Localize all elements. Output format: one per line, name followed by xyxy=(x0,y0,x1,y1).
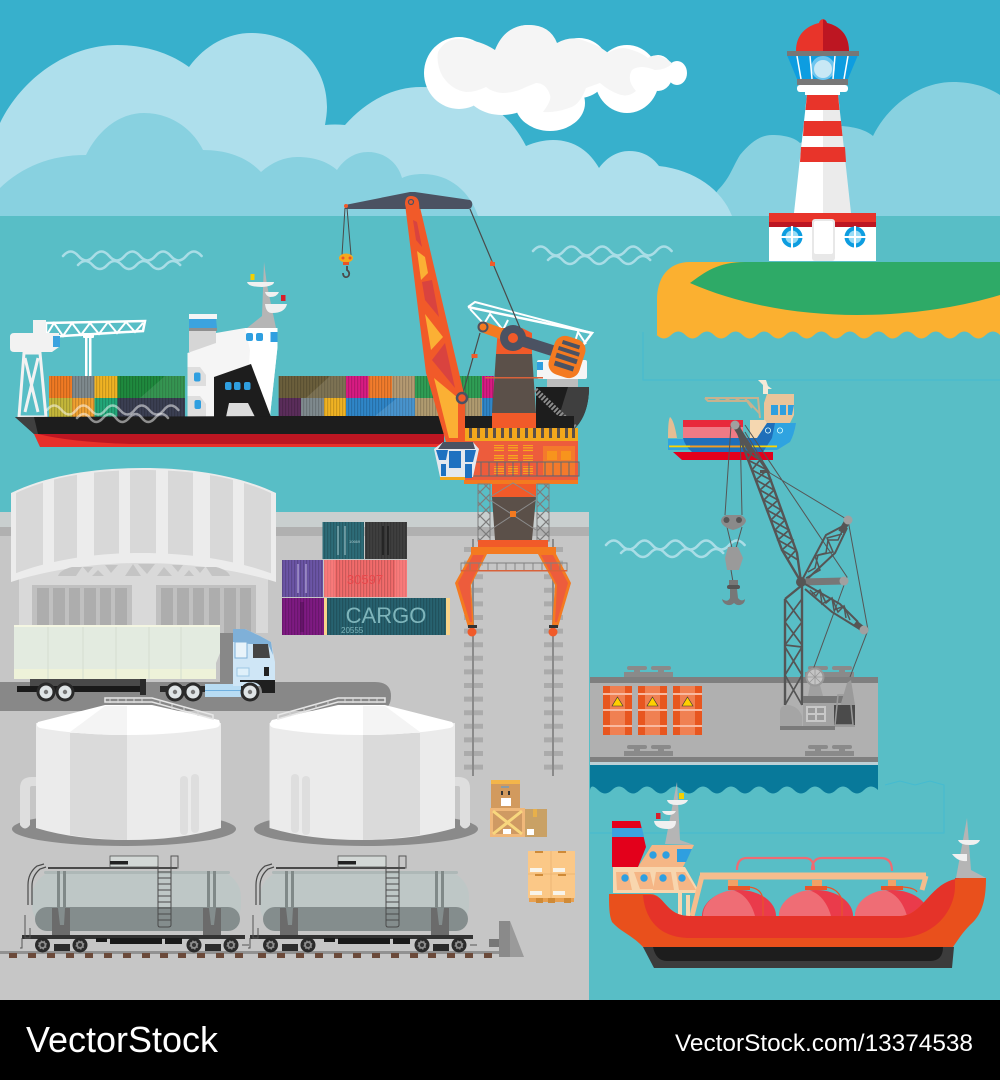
waves: upper right xyxy=(533,246,672,264)
curved end ladder xyxy=(256,864,274,905)
container coral 30597 xyxy=(324,560,407,597)
dock xyxy=(590,666,878,765)
LPG tanker xyxy=(609,782,986,968)
jib arm xyxy=(478,322,588,381)
sand xyxy=(657,262,1000,338)
lantern room xyxy=(787,55,858,79)
top rail and walkway xyxy=(48,867,177,869)
container ship xyxy=(10,262,589,447)
drum roof xyxy=(11,468,276,582)
gantry crane xyxy=(339,192,592,636)
funnel xyxy=(612,821,646,867)
hook assembly xyxy=(721,425,746,605)
cardboard boxes and crate xyxy=(490,780,575,903)
bow with ladder xyxy=(536,387,589,429)
container CARGO: CARGO xyxy=(346,603,426,628)
container CARGO xyxy=(324,598,450,635)
frame xyxy=(22,935,245,939)
bridge xyxy=(613,845,700,893)
bollards xyxy=(624,666,854,756)
deck pipe frame xyxy=(680,858,926,916)
tower red bands xyxy=(800,94,846,162)
top beam xyxy=(345,192,472,209)
hull xyxy=(15,416,536,434)
container purple xyxy=(282,560,323,597)
truss band xyxy=(58,564,230,576)
tower xyxy=(794,94,823,213)
ropes xyxy=(463,209,520,393)
containers: aft stack xyxy=(49,376,185,417)
tank wagon left xyxy=(20,856,249,952)
waves: mid right xyxy=(606,540,745,557)
round windows xyxy=(782,226,802,248)
shipping containers xyxy=(282,522,450,635)
containers: forward stack xyxy=(279,376,494,416)
grass xyxy=(690,262,1000,315)
cab xyxy=(233,629,275,686)
gas domes xyxy=(702,880,929,942)
deck crane xyxy=(705,398,760,418)
cloud: right bank behind lighthouse xyxy=(700,82,1000,216)
tank xyxy=(260,871,469,931)
ground xyxy=(0,512,589,1000)
box top xyxy=(491,780,520,808)
legs xyxy=(455,554,487,627)
cargo xyxy=(683,420,743,438)
container dark xyxy=(365,522,407,559)
ladder xyxy=(158,866,171,927)
lower tower xyxy=(785,586,802,705)
tank xyxy=(32,871,241,931)
aft mast xyxy=(654,782,694,845)
bow mast xyxy=(952,818,986,878)
sky xyxy=(0,0,1000,216)
rail line and buffer stop xyxy=(0,921,524,958)
wooden crate xyxy=(490,808,525,837)
container teal xyxy=(322,522,364,559)
road xyxy=(0,682,391,711)
upper arm xyxy=(801,516,852,583)
top rail and walkway xyxy=(276,867,405,869)
bridge front on bow xyxy=(537,360,587,379)
container coral 30597: 30597 xyxy=(347,572,383,587)
ropes xyxy=(745,425,868,678)
truck xyxy=(14,625,275,702)
red keel xyxy=(673,452,773,460)
container CARGO: 20555 xyxy=(341,626,364,635)
counterweight xyxy=(546,333,588,381)
hazard drums xyxy=(603,686,702,735)
waves: upper left xyxy=(63,252,202,269)
cloud: white xyxy=(424,25,687,131)
straps xyxy=(285,871,444,908)
lighthouse xyxy=(769,19,876,261)
box right xyxy=(525,809,547,837)
straps xyxy=(57,871,216,908)
cloud: front left bank xyxy=(0,113,478,216)
dark water under dock xyxy=(590,762,878,794)
main boom xyxy=(405,196,467,442)
hook xyxy=(339,208,353,277)
container teal: 10669 xyxy=(349,539,361,544)
frame xyxy=(250,935,473,939)
dock crane xyxy=(721,420,868,730)
middle arm xyxy=(801,581,844,582)
faint outline rectangles in water xyxy=(590,332,1000,833)
red waterline xyxy=(34,434,444,447)
stern jib crane xyxy=(10,320,145,417)
rear arm truss xyxy=(468,302,592,345)
mast xyxy=(247,262,276,328)
curved end ladder xyxy=(28,864,46,905)
portal xyxy=(455,483,571,636)
wheels xyxy=(36,682,56,702)
small container ship xyxy=(668,380,796,460)
island xyxy=(657,262,1000,338)
hull xyxy=(609,878,986,947)
gantry tower xyxy=(492,354,536,413)
dome xyxy=(796,19,849,51)
machine house xyxy=(464,428,579,484)
crane base xyxy=(780,668,855,730)
mast xyxy=(758,380,772,394)
gallery xyxy=(805,89,840,95)
trailer xyxy=(14,625,220,679)
sea xyxy=(0,216,1000,1000)
waves over ship xyxy=(47,406,178,422)
tank wagon right xyxy=(248,856,477,952)
rail tracks under crane xyxy=(464,539,563,776)
rigging rail xyxy=(485,377,543,378)
keel xyxy=(643,947,954,968)
operator cabin xyxy=(434,442,479,480)
cabin xyxy=(764,394,794,423)
oil tank left xyxy=(12,698,236,846)
superstructure xyxy=(188,314,278,417)
watermark footer xyxy=(0,1000,1000,1080)
oil tank right xyxy=(254,698,478,846)
container magenta xyxy=(282,598,324,635)
lower arm xyxy=(805,584,868,634)
ladder xyxy=(386,866,399,927)
hull xyxy=(668,423,796,450)
bow fin xyxy=(668,417,677,438)
brand name: VectorStock xyxy=(26,1019,219,1060)
cloud: back large left bank xyxy=(0,33,732,216)
warehouse xyxy=(11,468,276,633)
pallet stack xyxy=(528,851,575,903)
chassis xyxy=(17,686,144,692)
walkway xyxy=(461,563,567,571)
upper boom xyxy=(730,420,801,582)
doors xyxy=(32,585,256,633)
image url: VectorStock.com/13374538 xyxy=(675,1030,973,1057)
keeper house xyxy=(769,213,876,261)
